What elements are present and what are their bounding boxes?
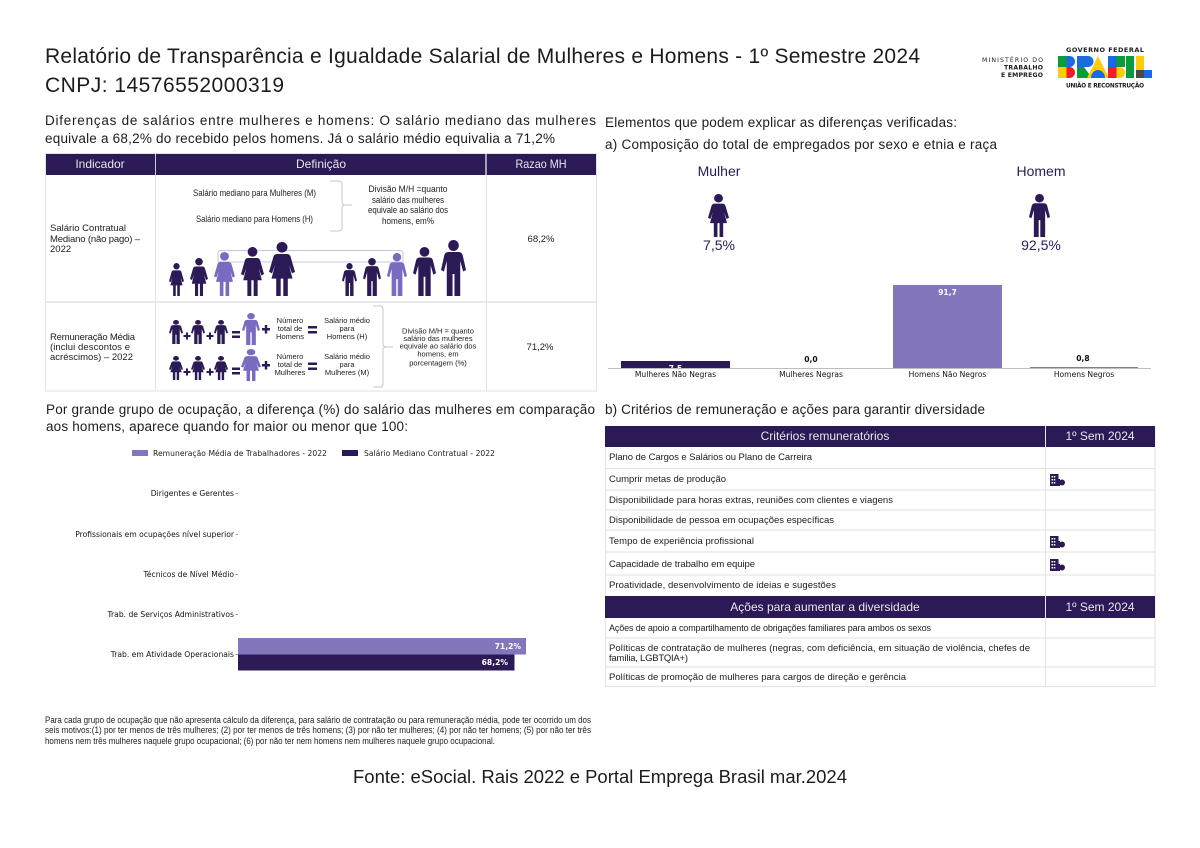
icon: building, production goals xyxy=(1050,474,1065,486)
composition: man share: 92,5% xyxy=(1021,237,1061,253)
formula: women xyxy=(169,349,317,381)
formula labels: average salary: Homens (H) xyxy=(327,332,368,341)
bar chart: occupation groups xyxy=(75,489,526,670)
icon: building, experience xyxy=(1050,536,1065,548)
average division explanation xyxy=(400,326,477,368)
title xyxy=(45,45,920,97)
average division explanation: Divisão M/H = quanto xyxy=(402,326,474,336)
criteria list: Tempo de experiência profissional xyxy=(609,536,754,547)
logo: ministério: E EMPREGO xyxy=(1001,72,1043,79)
legend: Remuneração Média de Trabalhadores - 2022 xyxy=(153,449,327,458)
logo: ministério: MINISTÉRIO DO xyxy=(982,55,1043,64)
logo: governo federal brasil xyxy=(1058,46,1152,90)
bar chart: sex and race composition: 0,0 xyxy=(804,355,818,364)
header: diversity actions xyxy=(605,596,1155,618)
median division explanation xyxy=(368,184,448,226)
formula labels: average salary: Salário médio xyxy=(324,352,370,361)
bar chart: sex and race composition xyxy=(608,285,1151,379)
logo: governo federal brasil: UNIÃO E RECONSTRUÇÃO xyxy=(1066,82,1144,90)
bar chart: sex and race composition: 91,7 xyxy=(938,288,957,297)
table header: Indicador xyxy=(75,157,125,171)
formula labels: average salary: para xyxy=(339,360,355,369)
formula labels: average salary: Mulheres (M) xyxy=(325,368,370,377)
bar: average pay xyxy=(238,638,526,654)
bar chart: occupation groups: 68,2% xyxy=(482,658,508,667)
formula labels: total: total de xyxy=(278,324,302,333)
value: average ratio: 71,2% xyxy=(527,342,554,353)
clipped value label: 7,5 xyxy=(669,364,682,373)
title: CNPJ: 14576552000319 xyxy=(45,74,284,97)
row label: median salary xyxy=(50,223,141,255)
criteria list: Proatividade, desenvolvimento de ideias e sugestões xyxy=(609,580,836,591)
header: criteria: Critérios remuneratórios xyxy=(761,429,889,443)
formula labels: total xyxy=(275,316,306,377)
criteria list: Cumprir metas de produção xyxy=(609,474,726,485)
heading: composition: a) Composição do total de empregados por sexo e etnia e raça xyxy=(605,137,997,152)
composition: woman share xyxy=(698,163,741,253)
bar chart: occupation groups: Trab. em Atividade Operacionais xyxy=(110,650,234,659)
bar chart: occupation groups: Técnicos de Nível Médio xyxy=(142,570,234,579)
median definition text: Salário mediano para Mulheres (M) xyxy=(193,188,316,199)
composition: man share xyxy=(1016,163,1066,253)
intro text: salary differences: equivale a 68,2% do recebido pelos homens. Já o salário médio equivalia a 71,2% xyxy=(45,131,555,146)
criteria list: Disponibilidade de pessoa em ocupações específicas xyxy=(609,515,834,526)
median division explanation: homens, em% xyxy=(382,216,434,226)
icons: five men xyxy=(342,240,466,296)
formula labels: average salary: para xyxy=(339,324,355,333)
formula labels: total: Número xyxy=(277,352,303,361)
brace: median xyxy=(330,181,352,231)
legend: Salário Mediano Contratual - 2022 xyxy=(364,449,495,458)
footnote xyxy=(45,715,591,746)
median division explanation: salário das mulheres xyxy=(372,195,444,205)
criteria list: Disponibilidade para horas extras, reuniões com clientes e viagens xyxy=(609,495,893,506)
table header: Definição xyxy=(296,157,346,171)
row label: average pay: (inclui descontos e xyxy=(50,342,130,353)
formula: men xyxy=(169,313,317,345)
table header xyxy=(46,154,596,175)
row label: average pay: acréscimos) – 2022 xyxy=(50,352,133,363)
row label: median salary: Mediano (não pago) – xyxy=(50,234,141,245)
formula labels: average salary: Salário médio xyxy=(324,316,370,325)
diversity actions list: família, LGBTQIA+) xyxy=(609,653,688,664)
title: Relatório de Transparência e Igualdade Salarial de Mulheres e Homens - 1º Semestre 2024 xyxy=(45,45,920,68)
heading: occupation group: Por grande grupo de ocupação, a diferença (%) do salário das mulheres em comparação xyxy=(46,402,595,417)
bar chart: sex and race composition: Homens Negros xyxy=(1054,370,1114,379)
median division explanation: equivale ao salário dos xyxy=(368,205,448,215)
heading: explanatory elements: Elementos que podem explicar as diferenças verificadas: xyxy=(605,115,957,130)
bar chart: occupation groups: 71,2% xyxy=(495,642,521,651)
formula labels: total: Número xyxy=(277,316,303,325)
logo: ministério: TRABALHO xyxy=(1004,64,1043,72)
average division explanation: porcentagem (%) xyxy=(409,358,467,368)
diversity actions list: Políticas de promoção de mulheres para cargos de direção e gerência xyxy=(609,672,907,683)
bar chart: occupation groups: Trab. de Serviços Administrativos xyxy=(107,610,234,619)
composition: man share: Homem xyxy=(1016,163,1066,179)
logo: governo federal brasil: GOVERNO FEDERAL xyxy=(1066,46,1144,54)
formula labels: total: Mulheres xyxy=(275,368,306,377)
legend xyxy=(132,449,495,458)
header: diversity actions: 1º Sem 2024 xyxy=(1065,600,1135,614)
median connector box xyxy=(218,250,403,262)
bar chart: occupation groups: Dirigentes e Gerentes xyxy=(151,489,234,498)
median division explanation: Divisão M/H =quanto xyxy=(368,184,448,194)
heading: occupation group xyxy=(46,402,595,434)
average division explanation: equivale ao salário dos xyxy=(400,342,477,350)
median definition text xyxy=(193,188,316,225)
diversity actions list xyxy=(609,623,1030,683)
composition: woman share: 7,5% xyxy=(703,237,735,253)
row label: median salary: Salário Contratual xyxy=(50,223,126,234)
footnote: Para cada grupo de ocupação que não apresenta cálculo da diferença, para salário de contratação ou para remuneração média, pode ter ocorrido um dos xyxy=(45,715,591,725)
header: diversity actions: Ações para aumentar a diversidade xyxy=(730,600,920,614)
intro text: salary differences: Diferenças de salários entre mulheres e homens: O salário mediano das mulheres xyxy=(45,113,596,128)
bar chart: sex and race composition: Mulheres Não Negras xyxy=(635,370,716,379)
logo: ministério xyxy=(982,55,1043,79)
bar chart: sex and race composition: 0,8 xyxy=(1076,354,1090,363)
heading: criteria: b) Critérios de remuneração e ações para garantir diversidade xyxy=(605,402,985,417)
criteria list: Capacidade de trabalho em equipe xyxy=(609,559,755,570)
footnote: homens nem três mulheres naquele grupo ocupacional; (6) por não ter nem homens nem mulheres naquele grupo ocupacional. xyxy=(45,736,495,746)
row label: average pay: Remuneração Média xyxy=(50,332,136,343)
formula labels: total: Homens xyxy=(276,332,304,341)
median definition text: Salário mediano para Homens (H) xyxy=(196,214,313,225)
icon: building, teamwork xyxy=(1050,559,1065,571)
average division explanation: homens, em xyxy=(417,350,459,358)
bar chart: sex and race composition: Mulheres Negras xyxy=(779,370,843,379)
composition: woman share: Mulher xyxy=(698,163,741,179)
source: Fonte: eSocial. Rais 2022 e Portal Emprega Brasil mar.2024 xyxy=(353,766,847,787)
value: median ratio: 68,2% xyxy=(528,234,555,245)
header: criteria: 1º Sem 2024 xyxy=(1065,429,1135,443)
row label: average pay xyxy=(50,332,136,363)
bar: median salary xyxy=(238,654,514,670)
bar chart: occupation groups: Profissionais em ocupações nível superior xyxy=(75,530,235,539)
formula labels: average salary xyxy=(324,316,370,377)
criteria list xyxy=(609,452,893,591)
table header: Razao MH xyxy=(516,157,566,171)
formula labels: total: total de xyxy=(278,360,302,369)
diversity actions list: Políticas de contratação de mulheres (negras, com deficiência, em situação de violência, chefes de xyxy=(609,643,1030,654)
heading: occupation group: aos homens, aparece quando for maior ou menor que 100: xyxy=(46,419,408,434)
row label: median salary: 2022 xyxy=(50,244,71,255)
panel: indicator table xyxy=(45,154,596,391)
intro text: salary differences xyxy=(45,113,596,146)
median bracket bottom xyxy=(218,261,403,263)
bar chart: sex and race composition: Homens Não Negros xyxy=(909,370,986,379)
average division explanation: salário das mulheres xyxy=(403,334,473,343)
panel: criteria table xyxy=(605,426,1155,687)
diversity actions list: Ações de apoio a compartilhamento de obrigações familiares para ambos os sexos xyxy=(609,623,932,633)
icons: five women xyxy=(169,242,295,296)
footnote: seis motivos:(1) por ter menos de três mulheres; (2) por ter menos de três homens; (3) por não ter mulheres; (4) por não ter homens; (5) por não ter três xyxy=(45,725,591,735)
brace: average xyxy=(373,306,393,387)
criteria list: Plano de Cargos e Salários ou Plano de Carreira xyxy=(609,452,813,463)
header: criteria xyxy=(605,426,1155,447)
